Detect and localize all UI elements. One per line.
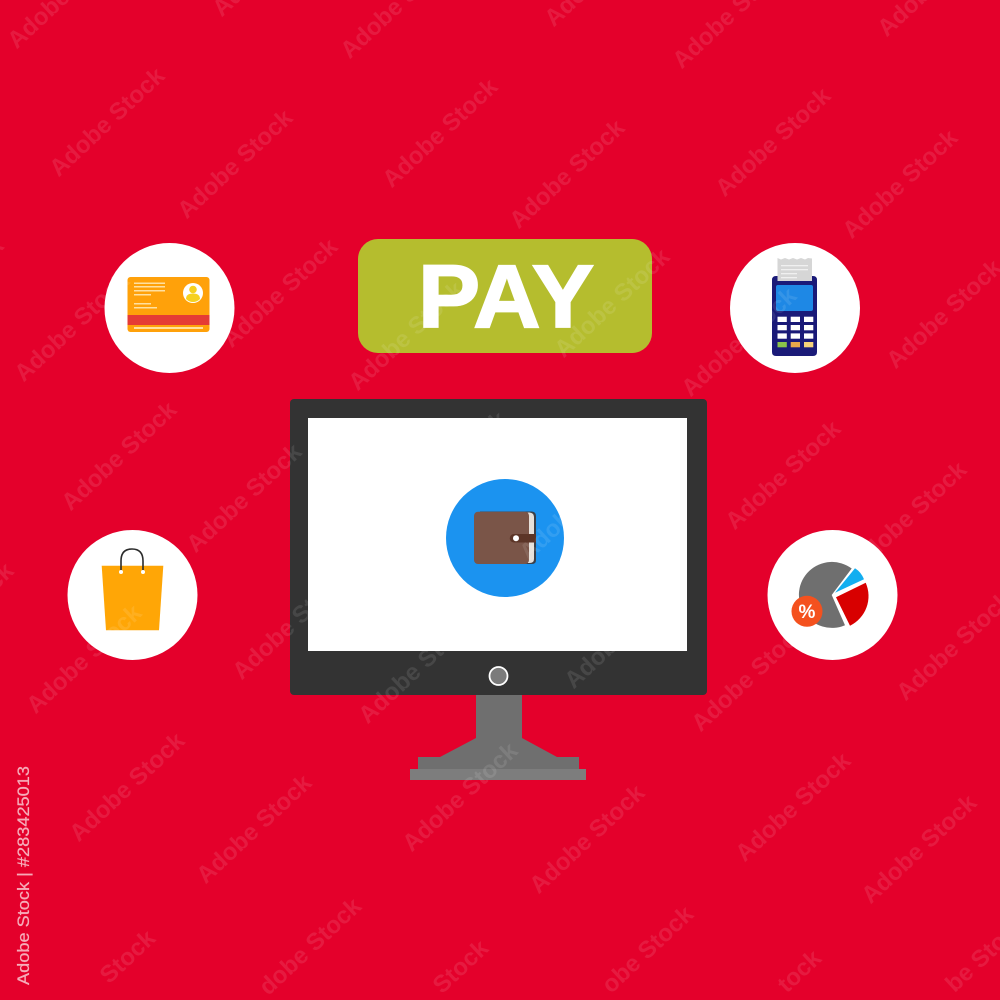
watermark pattern: Adobe Stock [181, 438, 308, 558]
watermark pattern: Adobe Stock [9, 267, 136, 387]
watermark pattern: tock [772, 944, 827, 998]
watermark pattern: Adobe Stock [504, 114, 631, 234]
icon: credit card [104, 243, 234, 373]
monitor screen [308, 418, 687, 651]
monitor [290, 399, 707, 780]
watermark pattern: obe Stock [597, 900, 699, 999]
watermark pattern: Adobe Stock [191, 769, 318, 889]
watermark pattern: Adobe Stock [549, 243, 676, 363]
watermark pattern: Adobe Stock [217, 233, 344, 353]
icon: pie chart with percent badge [768, 530, 898, 660]
watermark pattern: Adobe Stock [343, 276, 470, 396]
watermark pattern: Adobe Stock [64, 727, 191, 847]
watermark pattern: Adobe Stock [846, 456, 973, 576]
watermark pattern: Adobe Stock [514, 446, 641, 566]
icon: pie chart with percent badge: % [799, 602, 816, 623]
watermark pattern: Adobe Stock [227, 565, 354, 685]
stock id side text: Adobe Stock | #283425013 [15, 766, 33, 985]
watermark pattern: Adobe Stock [720, 415, 847, 535]
monitor stand [410, 694, 586, 780]
watermark pattern: Adobe Stock [730, 747, 857, 867]
watermark pattern: Adobe Stock [172, 104, 299, 224]
watermark pattern: Adobe Stock [353, 609, 480, 729]
pay button [358, 239, 652, 353]
watermark pattern: Adobe Stock [710, 82, 837, 202]
icon: card terminal [730, 243, 860, 373]
watermark pattern: Adobe Stock [397, 737, 524, 857]
icon: shopping bag [68, 530, 198, 660]
watermark pattern: Adobe Stock [559, 574, 686, 694]
watermark pattern: Adobe Stock [56, 396, 183, 516]
wallet icon [446, 479, 564, 597]
watermark pattern: Adobe Stock [856, 789, 983, 909]
watermark pattern: Adobe Stock [44, 62, 171, 182]
watermark pattern: Adobe Stock [837, 124, 964, 244]
watermark pattern: Adobe Stock [21, 599, 148, 719]
monitor frame [290, 399, 707, 695]
watermark pattern: Adobe Stock [386, 406, 513, 526]
watermark pattern: Adobe Stock [524, 779, 651, 899]
watermark pattern: Adobe Stock [377, 73, 504, 193]
watermark pattern: Adobe Stock [676, 282, 803, 402]
monitor power button [490, 667, 508, 685]
watermark pattern: Adobe Stock [686, 617, 813, 737]
watermark pattern: Stock [428, 934, 494, 999]
watermark pattern: Stock [95, 924, 161, 989]
pay button: PAY [418, 246, 594, 346]
watermark pattern: dobe Stock [254, 892, 367, 1000]
